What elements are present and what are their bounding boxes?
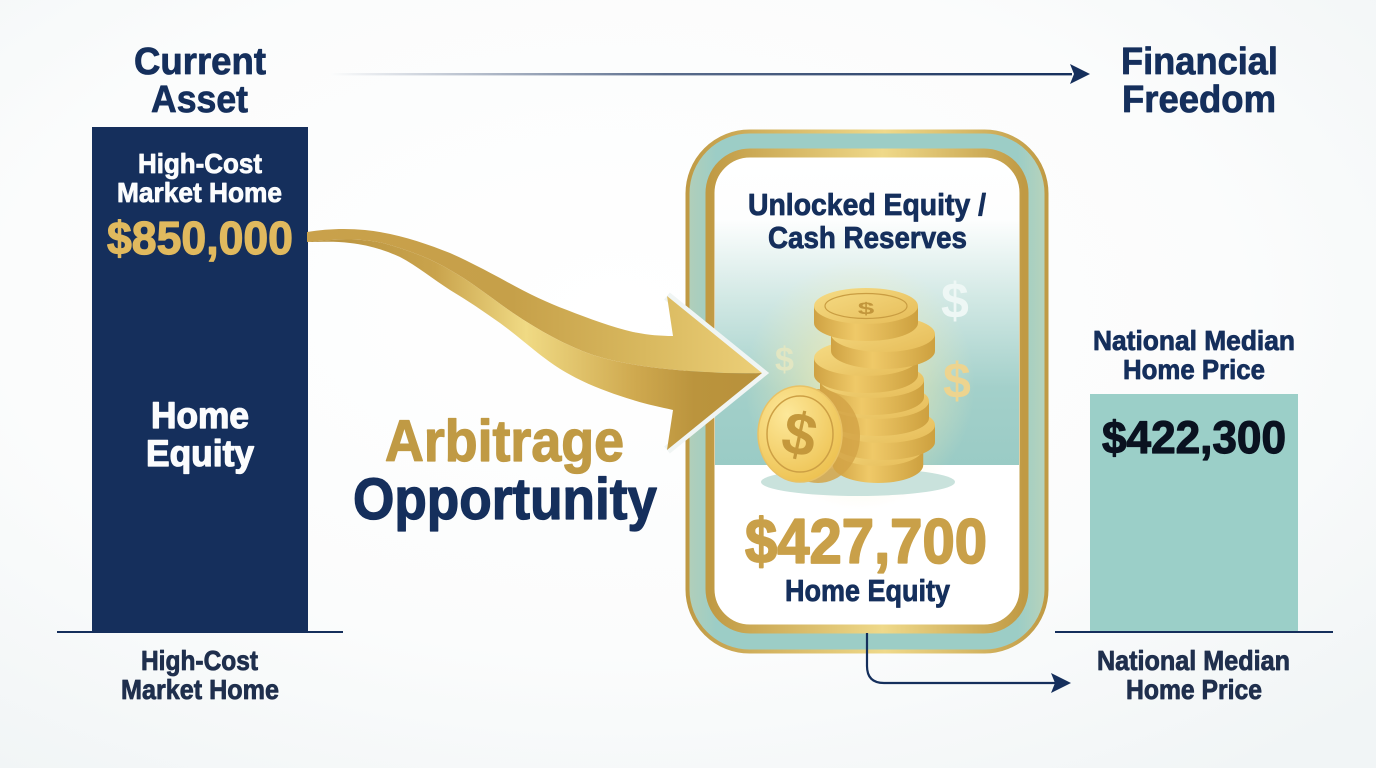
bar label: high-cost market home: Market Home [117,177,282,208]
heading: arbitrage opportunity: Arbitrage [385,409,624,474]
axis label: high-cost market home: High-Cost [141,645,258,676]
bar label: home equity [146,395,254,474]
axis label: high-cost market home: Market Home [121,674,279,705]
axis label: national median home price: National Median [1097,645,1290,676]
heading: current asset: Asset [151,79,248,121]
label: national median home price above bar [1093,325,1295,385]
card title: Unlocked Equity / [748,187,986,222]
label: national median home price above bar: National Median [1093,325,1295,356]
axis label: high-cost market home [121,645,279,705]
icon: floating dollar signs: $ [943,353,971,409]
heading: arbitrage opportunity [353,409,657,532]
bar label: high-cost market home: High-Cost [138,148,262,179]
bar: national median home price [1090,394,1298,632]
icon: floating dollar signs: $ [775,341,794,379]
arrow: elbow from card to national median [867,633,1071,693]
bar label: home equity: Equity [146,433,254,474]
icon: floating dollar signs [775,273,971,409]
icon: front coin [758,386,860,483]
heading: financial freedom: Freedom [1122,79,1276,121]
bar label: home equity: Home [151,395,249,436]
icon: front coin: $ [776,398,823,471]
bar value: $850,000: $850,000 [107,212,293,264]
axis label: national median home price [1097,645,1290,705]
card title: Cash Reserves [768,220,967,255]
card label: home equity: Home Equity [785,573,951,608]
panel: unlocked equity card [688,132,1046,652]
heading: arbitrage opportunity: Opportunity [353,467,657,532]
bar: high-cost market home [92,127,308,632]
card scene background [715,158,1019,465]
coin glow [745,260,975,510]
bar label: high-cost market home [117,148,282,208]
icon: coin stack [758,288,955,496]
heading: current asset [134,41,266,121]
icon: coin stack: $ [858,300,875,318]
bar value: $422,300: $422,300 [1102,412,1286,463]
axis baseline right [1055,631,1333,633]
heading: current asset: Current [134,41,266,83]
card title [748,187,986,255]
heading: financial freedom [1121,41,1278,121]
axis baseline left [57,631,343,633]
label: national median home price above bar: Home Price [1123,354,1265,385]
heading: financial freedom: Financial [1121,41,1278,83]
arrow: gold arbitrage arrow [307,229,762,450]
arrow: progress line to financial freedom [330,64,1090,84]
card value: $427,700: $427,700 [745,507,987,577]
axis label: national median home price: Home Price [1126,674,1262,705]
icon: floating dollar signs: $ [941,273,969,329]
